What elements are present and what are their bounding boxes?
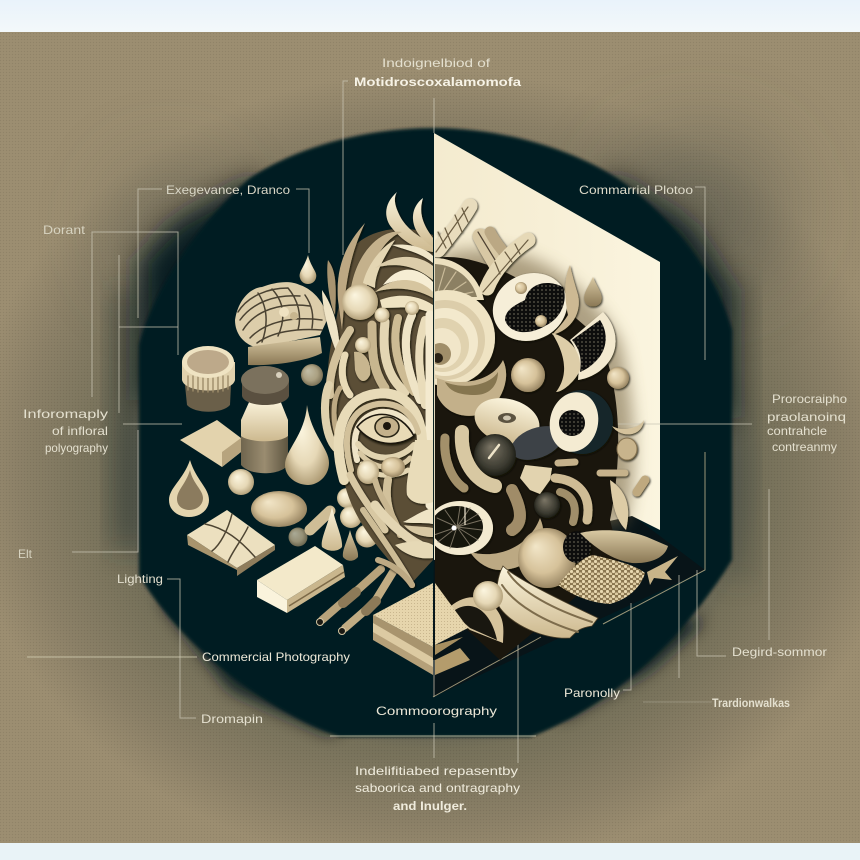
lips <box>403 508 433 537</box>
icon: spiral shell <box>435 290 496 386</box>
icon: dark berry cluster <box>563 531 591 563</box>
icon: tan horn <box>552 333 580 392</box>
icon: tan plume <box>552 265 579 335</box>
label: degird: Degird-sommor <box>732 645 827 659</box>
label: left text block: Inforomaply <box>23 407 108 421</box>
collage figures <box>399 206 645 588</box>
icon: half lemon <box>435 258 484 300</box>
icon: jar two <box>241 366 289 473</box>
icon: layered block <box>257 546 345 613</box>
label: top left callout: Exegevance, Dranco <box>166 183 290 197</box>
icon: ivory ball <box>473 581 503 611</box>
upper ornaments <box>342 284 378 320</box>
icon: potato oval <box>251 491 307 527</box>
icon: small sphere <box>301 364 323 386</box>
dark collage base <box>435 257 620 660</box>
icon: round ball <box>228 469 254 495</box>
icon: caviar fruit <box>492 272 568 342</box>
cream wall <box>434 133 660 560</box>
label: top right callout: Commarrial Plotoo <box>579 183 693 197</box>
lower strands <box>363 505 433 585</box>
icon: tan band <box>248 337 322 365</box>
label: dromapin: Dromapin <box>201 712 263 726</box>
icon: bananas <box>497 566 598 638</box>
icon: twisted roll <box>235 282 328 348</box>
bottom band <box>0 843 860 860</box>
icon: wheat ears <box>436 206 528 292</box>
title: Indoignelbiod of <box>382 56 491 70</box>
icon: cream ball <box>511 358 545 392</box>
icon: cone two <box>343 530 358 561</box>
right half: food collage <box>435 198 652 660</box>
footer text block <box>355 764 520 813</box>
icon: half citrus <box>447 597 503 643</box>
icon: tubes <box>316 569 393 634</box>
floor plane <box>433 515 705 697</box>
footer text block: saboorica and ontragraphy <box>355 781 520 795</box>
label: lighting: Lighting <box>117 572 163 586</box>
icon: cream block <box>180 420 241 467</box>
icon: pear shape <box>285 405 329 485</box>
icon: banana ridges <box>502 572 592 632</box>
cheek and nose <box>350 440 433 535</box>
label: right text block: contreanmy <box>772 440 837 454</box>
label: paronolly: Paronolly <box>564 686 620 700</box>
label: commoorography: Commoorography <box>376 704 497 718</box>
label: trardionwalkas: Trardionwalkas <box>712 696 790 710</box>
footer text block: Indelifitiabed repasentby <box>355 764 518 778</box>
icon: small grey ball <box>288 528 308 546</box>
footer text block: and Inulger. <box>393 799 467 813</box>
title: Motidroscoxalamomofa <box>354 75 521 89</box>
label: left text block: polyography <box>45 441 108 455</box>
icon: dark sphere <box>474 434 516 476</box>
icon: nut <box>607 367 629 389</box>
icon: wall drop <box>584 277 602 306</box>
icon: dark feather <box>512 426 561 461</box>
icon: lemon slice <box>427 501 493 555</box>
icon: cream bowl <box>580 530 668 563</box>
icon: chocolate bar <box>187 510 275 576</box>
hair plumes <box>322 192 433 360</box>
face strands <box>322 192 433 585</box>
icon: cone one <box>322 507 342 551</box>
icon: caviar half disc <box>570 312 616 380</box>
icon: pineapple <box>558 555 678 604</box>
icon: pale apple <box>518 528 576 588</box>
left still-life objects <box>169 255 393 634</box>
eye and brow <box>339 393 422 480</box>
icon: jar one <box>182 346 235 412</box>
title <box>354 56 521 89</box>
label: right text block: Prorocraipho <box>772 392 847 406</box>
label: right text block: praolanoinq <box>767 410 846 424</box>
label: elt: Elt <box>18 547 33 561</box>
icon: teardrop <box>169 460 209 517</box>
icon: tan saucer <box>470 518 543 570</box>
face base <box>328 229 433 585</box>
icon: layered sheets <box>373 583 470 675</box>
label: left text block <box>23 407 108 455</box>
label: right text block <box>767 392 847 454</box>
icon: tan bowl <box>437 360 506 416</box>
label: commercial photography: Commercial Photography <box>202 650 350 664</box>
icon: eye disc <box>474 398 540 444</box>
top band <box>0 0 860 32</box>
icon: avocado <box>550 390 614 456</box>
icon: cream drop <box>300 255 316 284</box>
label: dorant: Dorant <box>43 223 86 237</box>
icon: roller <box>310 511 330 530</box>
mid strands <box>325 315 430 505</box>
icon: small balls <box>337 488 378 548</box>
wall shadow behind objects <box>440 249 634 540</box>
dark circular stage <box>139 128 732 737</box>
label: right text block: contrahcle <box>767 424 827 438</box>
label: left text block: of infloral <box>52 424 108 438</box>
face: left half <box>322 192 433 585</box>
icon: lower curves <box>445 420 645 530</box>
connector lines <box>27 81 769 763</box>
